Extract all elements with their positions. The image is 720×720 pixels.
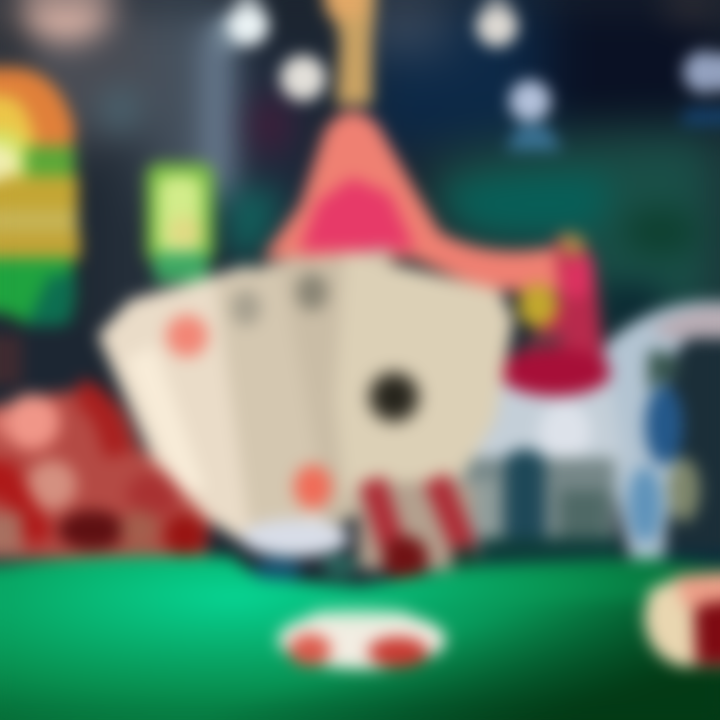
blue and white chip on felt bbox=[241, 519, 358, 582]
felt shading bbox=[0, 600, 720, 720]
fan of playing cards bbox=[98, 248, 514, 540]
gold ornament at top of hat bbox=[322, 0, 376, 105]
light: cream bbox=[476, 5, 518, 47]
light: peach bbox=[15, 0, 115, 42]
light: right bbox=[680, 51, 720, 125]
card pip: red bottom bbox=[294, 465, 332, 509]
red chips left bbox=[0, 390, 210, 558]
card highlight bbox=[125, 345, 205, 495]
yellow-green glowing panel bbox=[146, 163, 214, 282]
card: second bbox=[215, 255, 360, 535]
card: front bbox=[335, 252, 514, 495]
card pip: red left bbox=[166, 315, 208, 357]
card pip: black centre bbox=[367, 370, 421, 424]
jester hat bbox=[262, 111, 610, 396]
light: pale blue bbox=[506, 80, 562, 150]
hat red tail bbox=[500, 233, 610, 396]
red chips centre bbox=[358, 478, 479, 580]
light: white lower bbox=[280, 55, 326, 101]
card pip: grey small bbox=[231, 290, 261, 326]
chip lying on felt bbox=[278, 609, 446, 669]
felt surface bbox=[0, 555, 720, 720]
teal table backdrop bbox=[430, 132, 720, 330]
card: third bbox=[280, 248, 400, 530]
white chips behind the cards bbox=[440, 378, 625, 470]
card pip: grey second bbox=[296, 273, 328, 311]
left stack of colourful chips bbox=[0, 68, 90, 390]
hat centre bbox=[300, 178, 415, 250]
hat outline arch bbox=[262, 111, 575, 293]
bokeh lights bbox=[15, 0, 720, 150]
middle stack of dark teal chips bbox=[455, 449, 620, 568]
light: white upper bbox=[210, 4, 269, 54]
green felt table bbox=[0, 555, 720, 720]
card: left bbox=[98, 265, 330, 540]
chip stack bottom right bbox=[644, 572, 720, 666]
right stack of blue and white chips bbox=[604, 302, 720, 585]
